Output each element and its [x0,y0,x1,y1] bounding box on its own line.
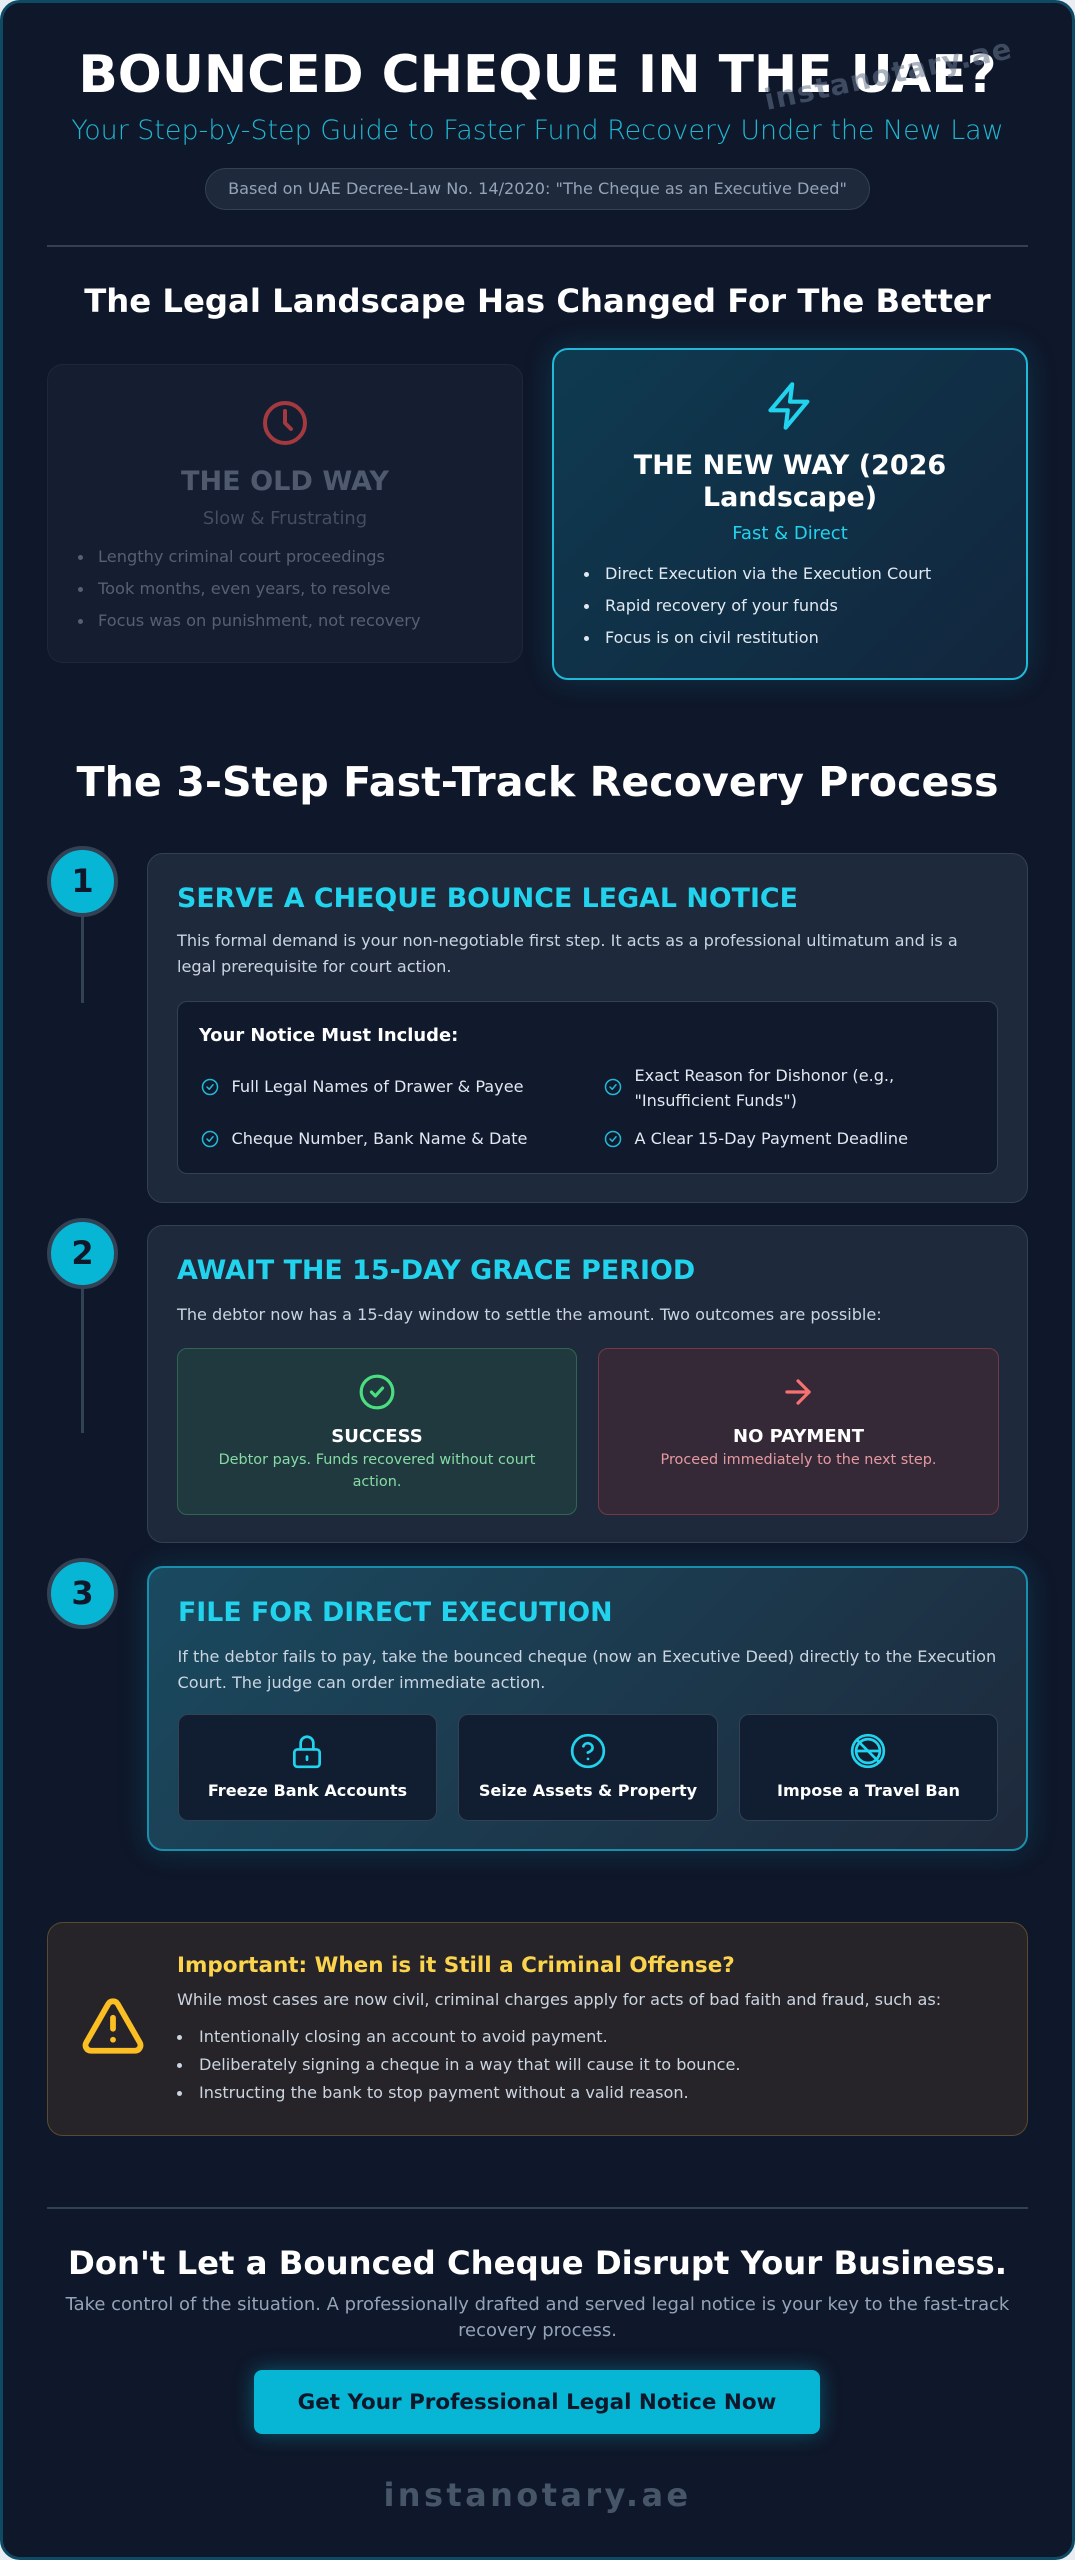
checklist box [177,1001,998,1174]
outcome: success [177,1348,577,1515]
icon: lock [293,1735,321,1768]
old way title: THE OLD WAY [181,466,389,497]
button: Get Your Professional Legal Notice Now [298,2390,776,2415]
icon: lightning bolt [768,382,810,430]
icon: check circle [360,1374,394,1410]
icon: travel ban [850,1734,886,1768]
step 2 heading: AWAIT THE 15-DAY GRACE PERIOD [177,1255,695,1286]
item: reason: Exact Reason for Dishonor (e.g., [634,1066,894,1085]
panel: criminal offense warning [47,1922,1028,2136]
item: names: Full Legal Names of Drawer & Payee [232,1077,524,1096]
heading: 3-step process: The 3-Step Fast-Track Recovery Process [77,758,998,806]
step 3 description: Court. The judge can order immediate action. [178,1673,545,1692]
warning list: Deliberately signing a cheque in a way that will cause it to bounce. [199,2055,741,2074]
success label: SUCCESS [331,1426,423,1447]
icon: arrow right [785,1379,811,1405]
action: travel ban [739,1714,998,1821]
closing heading: Don't Let a Bounced Cheque Disrupt Your Business. [68,2244,1007,2282]
no payment label: NO PAYMENT [733,1426,864,1447]
step 3 description: If the debtor fails to pay, take the bounced cheque (now an Executive Deed) directly to the Execution [178,1647,996,1666]
warning list: Instructing the bank to stop payment without a valid reason. [199,2083,689,2102]
panel: step 2 [147,1225,1028,1543]
new way subtitle: Fast & Direct [732,523,848,544]
step 3 description [178,1647,996,1692]
step 1 description: This formal demand is your non-negotiable first step. It acts as a professional ultimatum and is a [177,931,958,950]
warning heading: Important: When is it Still a Criminal Offense? [177,1953,735,1978]
new way title: Landscape) [703,482,877,513]
old way list [78,547,421,630]
old way list: Took months, even years, to resolve [98,579,390,598]
item: cheque number: Cheque Number, Bank Name & Date [232,1129,527,1148]
panel: the old way [47,364,523,663]
panel: step 1 [147,853,1028,1203]
brand footer: instanotary.ae [383,2476,692,2514]
no payment text: Proceed immediately to the next step. [661,1452,936,1468]
step 1 description: legal prerequisite for court action. [177,957,452,976]
new way list: Focus is on civil restitution [605,628,819,646]
title: BOUNCED CHEQUE IN THE UAE? [78,45,997,105]
item: deadline: A Clear 15-Day Payment Deadline [634,1129,908,1148]
closing text [66,2294,1010,2341]
subtitle: Your Step-by-Step Guide to Faster Fund Recovery Under the New Law [71,115,1004,146]
step 1 marker: 1 [71,862,94,900]
action label: Impose a Travel Ban [777,1781,960,1800]
action label: Freeze Bank Accounts [208,1781,407,1800]
legal basis pill [205,168,870,210]
step 2 description: The debtor now has a 15-day window to settle the amount. Two outcomes are possible: [177,1305,882,1324]
old way list: Lengthy criminal court proceedings [98,547,385,566]
heading: legal landscape: The Legal Landscape Has Changed For The Better [84,282,991,320]
closing call to action [66,2244,1010,2514]
old way list: Focus was on punishment, not recovery [98,611,421,630]
success text: action. [353,1474,401,1490]
icon: warning triangle [82,1998,144,2054]
new way title: THE NEW WAY (2026 [634,450,946,481]
step 3 marker: 3 [71,1574,94,1612]
step 1 description [176,931,958,976]
step 3 heading: FILE FOR DIRECT EXECUTION [178,1597,613,1628]
checklist heading: Your Notice Must Include: [199,1025,458,1046]
action: freeze accounts [178,1714,437,1821]
action: seize assets [458,1714,718,1821]
new way list: Direct Execution via the Execution Court [605,564,931,582]
action label: Seize Assets & Property [479,1781,697,1800]
outcome: no payment [598,1348,999,1515]
panel: step 3 [147,1566,1028,1851]
new way list [584,564,931,646]
warning list [177,2027,741,2102]
new way title [634,450,946,513]
closing text: Take control of the situation. A professionally drafted and served legal notice is your key to the fast-track [66,2294,1009,2315]
item: reason [604,1066,894,1110]
success text [219,1452,536,1490]
panel: the new way [552,348,1028,680]
step 2 marker: 2 [71,1234,94,1272]
icon: question circle [570,1734,606,1768]
step 1 heading: SERVE A CHEQUE BOUNCE LEGAL NOTICE [177,883,798,914]
new way list: Rapid recovery of your funds [605,596,838,614]
button [254,2370,820,2434]
watermark: instanotary.ae [761,31,1015,117]
item: reason: "Insufficient Funds") [634,1091,797,1110]
closing text: recovery process. [458,2320,617,2341]
success text: Debtor pays. Funds recovered without court [219,1452,535,1468]
warning list: Intentionally closing an account to avoid payment. [199,2027,608,2046]
step 3 marker [47,1558,118,1629]
icon: clock [263,401,307,445]
warning description: While most cases are now civil, criminal charges apply for acts of bad faith and fraud, such as: [177,1990,941,2009]
step 2 marker [47,1218,118,1289]
header [71,45,1004,210]
legal basis pill: Based on UAE Decree-Law No. 14/2020: "The Cheque as an Executive Deed" [228,179,847,198]
old way subtitle: Slow & Frustrating [203,508,367,529]
step 1 marker [47,846,118,917]
